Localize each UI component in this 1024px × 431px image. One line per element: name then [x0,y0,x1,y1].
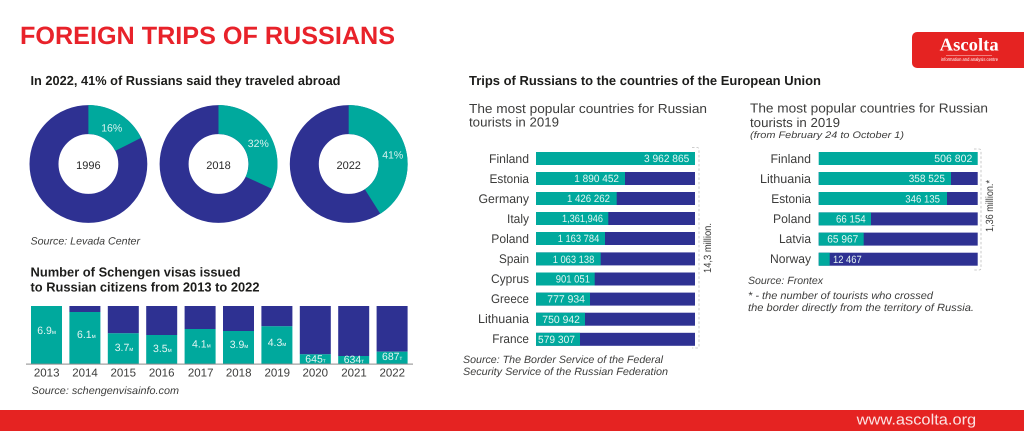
bar chart: popular countries 2019: Germany [478,192,530,206]
bar chart: Schengen visas: 6.9м [37,325,56,337]
source: schengenvisainfo: Source: schengenvisainfo.com [32,385,179,397]
bar chart: popular countries 2019: Estonia [490,172,529,186]
bar chart: direct border crossings: 65 967 [827,234,858,246]
bar chart: Schengen visas: 2019 [265,368,290,380]
bar chart: Schengen visas: 687т [382,351,403,363]
bar chart: Schengen visas: 2015 [111,368,136,380]
bar chart: popular countries 2019: 579 307 [538,334,575,346]
bar chart: popular countries 2019: 1 426 262 [567,193,610,205]
bar chart: popular countries 2019: 3 962 865 [644,153,689,165]
bracket: total 1.36 million: 1,36 million.* [984,180,996,232]
bar chart: popular countries 2019: Spain [499,252,529,266]
bar chart: direct border crossings: Estonia [771,192,811,206]
bar chart: direct border crossings: 346 135 [905,194,940,206]
source: Levada: Source: Levada Center [30,236,141,248]
heading: EU trips: Trips of Russians to the countries of the European Union [469,73,821,88]
bar chart: Schengen visas [26,306,413,380]
heading: Schengen visas: Number of Schengen visas issued [30,265,241,280]
bar chart: Schengen visas: 3.5м [153,343,172,355]
bar chart: popular countries 2019: Greece [491,292,529,306]
bar chart: popular countries 2019: 1 063 138 [553,254,594,266]
bar chart: Schengen visas: 2021 [341,368,367,380]
subheading: left chart: The most popular countries for Russian [469,101,707,116]
donut: 2022: 2022 [336,160,361,172]
title: FOREIGN TRIPS OF RUSSIANS [20,22,395,50]
bar chart: direct border crossings: Lithuania [760,172,811,186]
bar chart: direct border crossings: Latvia [779,232,811,246]
bar chart: popular countries 2019: 1,361,946 [562,213,603,225]
footer bar: www.ascolta.org [856,412,976,428]
donut: 1996: 16% [101,123,122,135]
bar chart: Schengen visas: 4.1м [192,339,211,351]
bar chart: Schengen visas: 2020 [303,368,328,380]
footer bar [0,410,1024,431]
bar chart: Schengen visas: 634т [344,354,364,366]
bar chart: direct border crossings: Norway [770,252,812,266]
subheading: right chart [750,101,988,141]
donut: 2018: 32% [248,138,269,150]
source: Border Service: Source: The Border Service of the Federal [463,354,664,366]
source: Frontex: Source: Frontex [748,275,824,287]
bar chart: direct border crossings [760,152,978,266]
bar chart: popular countries 2019: Italy [507,212,530,226]
bar chart: direct border crossings: 358 525 [909,173,945,185]
subheading: right chart: tourists in 2019 [750,115,840,130]
bar chart: popular countries 2019: 1 890 452 [574,173,619,185]
bracket: total 1.36 million [974,149,996,270]
bar chart: popular countries 2019 [478,152,695,346]
logo: Ascolta [912,32,1024,68]
bar chart: Schengen visas: 2016 [149,368,174,380]
bar chart: popular countries 2019: Poland [491,232,529,246]
source: Border Service: Security Service of the Russian Federation [463,366,668,378]
bar chart: popular countries 2019: France [492,332,529,346]
heading: share traveling abroad: In 2022, 41% of Russians said they traveled abroad [30,73,341,88]
bar chart: Schengen visas: 2013 [34,368,59,380]
bar chart: Schengen visas: 2014 [72,368,98,380]
donut: 2022: 41% [382,150,403,162]
subheading: right chart: (from February 24 to October 1) [750,130,904,141]
panel: donut charts [44,105,408,214]
bar chart: Schengen visas: 3.7м [115,342,133,354]
heading: Schengen visas: to Russian citizens from 2013 to 2022 [30,280,260,295]
donut: 2022 [304,105,408,214]
bar chart: Schengen visas: 645т [305,353,326,365]
donut: 2018 [174,105,278,208]
bar chart: Schengen visas: 2018 [226,368,251,380]
donut: 2018: 2018 [206,160,231,172]
donut: 1996 [44,105,141,208]
bar chart: popular countries 2019: Cyprus [491,272,529,286]
logo: Ascolta: Ascolta [940,34,999,54]
bar chart: popular countries 2019: 1 163 784 [558,233,599,245]
footnote: the border directly from the territory of Russia. [748,302,974,314]
footnote: * - the number of tourists who crossed [748,290,934,302]
logo: Ascolta: information and analysis centre [941,57,998,63]
bar chart: popular countries 2019: Finland [489,152,529,166]
bracket: total 14.3 million: 14,3 million. [702,223,714,273]
bar chart: Schengen visas: 2022 [380,368,405,380]
bar chart: direct border crossings: 66 154 [836,214,866,226]
subheading: right chart: The most popular countries for Russian [750,101,988,116]
bar chart: Schengen visas: 6.1м [77,329,96,341]
bar chart: popular countries 2019: 901 051 [556,274,590,286]
donut: 1996: 1996 [76,160,101,172]
bar chart: direct border crossings: Poland [773,212,811,226]
bar chart: Schengen visas: 2017 [188,368,213,380]
bar chart: Schengen visas: 4.3м [268,337,286,349]
bar chart: popular countries 2019: Lithuania [478,312,529,326]
bar chart: popular countries 2019: 750 942 [542,314,580,326]
bar chart: Schengen visas: 3.9м [230,339,248,351]
bracket: total 14.3 million [692,148,714,348]
bar chart: popular countries 2019: 777 934 [547,294,585,306]
bar chart: direct border crossings: 506 802 [934,153,972,165]
bar chart: direct border crossings: 12 467 [833,254,862,266]
subheading: left chart: tourists in 2019 [469,115,559,130]
bar chart: direct border crossings: Finland [770,152,811,166]
